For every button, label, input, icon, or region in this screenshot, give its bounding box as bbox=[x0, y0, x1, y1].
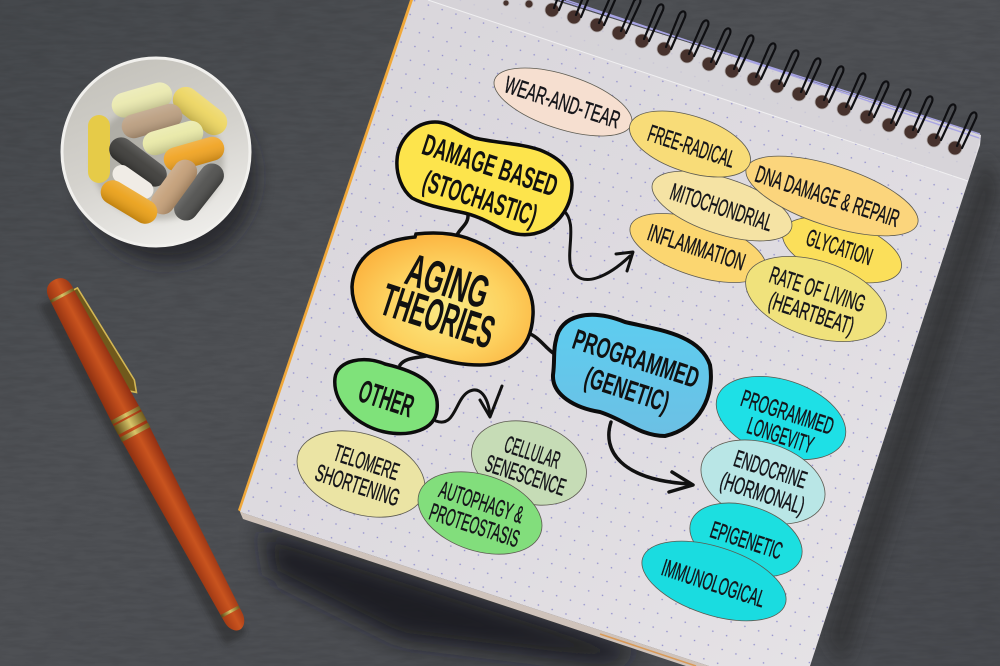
oval: immunological bbox=[632, 525, 796, 637]
oval: telomere shortening bbox=[286, 416, 436, 532]
capsules bbox=[88, 79, 232, 228]
oval: cellular senescence bbox=[461, 407, 597, 519]
oval: inflammation bbox=[622, 199, 774, 297]
node: programmed: PROGRAMMED bbox=[569, 324, 703, 395]
node: aging theories: THEORIES bbox=[375, 273, 501, 358]
orange bottom edge bbox=[600, 634, 696, 666]
oval: cellular senescence: CELLULAR bbox=[501, 431, 564, 475]
oval: glycation bbox=[774, 204, 910, 296]
bowl bbox=[62, 58, 250, 246]
notebook page bbox=[240, 0, 981, 666]
notebook bbox=[238, 0, 981, 666]
mind map bbox=[286, 54, 927, 637]
lavender page lines bbox=[560, 0, 980, 138]
pen body bbox=[40, 272, 254, 637]
oval: wear-and-tear bbox=[486, 54, 640, 150]
bowl shadow bbox=[80, 88, 256, 264]
oval: epigenetic bbox=[680, 490, 812, 590]
oval: autophagy and proteostasis: AUTOPHAGY & bbox=[436, 477, 527, 529]
oval: programmed longevity: PROGRAMMED bbox=[737, 385, 837, 441]
pen top band bbox=[50, 288, 74, 303]
connector lines bbox=[400, 214, 563, 365]
oval: wear-and-tear: WEAR-AND-TEAR bbox=[501, 71, 624, 134]
node: damage based: DAMAGE BASED bbox=[418, 129, 562, 203]
fountain pen bbox=[40, 269, 261, 640]
oval: programmed longevity: LONGEVITY bbox=[744, 413, 817, 459]
dot grid bbox=[240, 0, 981, 666]
oval: inflammation: INFLAMMATION bbox=[644, 219, 749, 276]
oval: endocrine hormonal bbox=[690, 425, 836, 539]
oval: mitochondrial: MITOCHONDRIAL bbox=[667, 179, 776, 237]
bowl of capsules bbox=[62, 58, 256, 264]
page stack edge bbox=[240, 512, 709, 666]
oval: free-radical bbox=[621, 98, 759, 190]
node: programmed bbox=[553, 315, 711, 436]
oval: endocrine hormonal: (HORMONAL) bbox=[717, 468, 808, 520]
oval: programmed longevity bbox=[706, 361, 856, 475]
oval: mitochondrial bbox=[644, 157, 800, 255]
oval: autophagy and proteostasis bbox=[407, 457, 553, 569]
oval: rate of living: RATE OF LIVING bbox=[766, 262, 869, 318]
oval: glycation: GLYCATION bbox=[803, 225, 876, 271]
pen clip bbox=[73, 285, 140, 396]
spiral binding bbox=[503, 0, 976, 155]
oval: dna damage and repair bbox=[737, 140, 927, 252]
oval: autophagy and proteostasis: PROTEOSTASIS bbox=[426, 499, 523, 553]
arrow: programmed to genetic theories bbox=[609, 422, 693, 492]
top perforated strip bbox=[428, 0, 981, 181]
node: programmed: (GENETIC) bbox=[580, 362, 673, 419]
node: damage based: (STOCHASTIC) bbox=[419, 165, 541, 233]
pen center band bbox=[111, 406, 150, 442]
oval: rate of living: (HEARTBEAT) bbox=[765, 287, 857, 340]
oval: immunological: IMMUNOLOGICAL bbox=[658, 554, 768, 613]
node: damage based bbox=[397, 122, 572, 235]
node: aging theories: AGING bbox=[400, 243, 496, 318]
oval: cellular senescence: SENESCENCE bbox=[482, 450, 569, 502]
arrow: damage based to stochastic theories bbox=[563, 210, 633, 280]
node: other: OTHER bbox=[354, 373, 419, 424]
node: other bbox=[335, 360, 437, 434]
node: aging theories bbox=[352, 233, 533, 365]
oval: endocrine hormonal: ENDOCRINE bbox=[730, 445, 810, 494]
pen shadow bbox=[50, 300, 236, 640]
oval: epigenetic: EPIGENETIC bbox=[707, 517, 786, 565]
pen end band bbox=[221, 606, 240, 618]
oval: free-radical: FREE-RADICAL bbox=[644, 120, 738, 174]
notebook shadows bbox=[262, 150, 1000, 666]
oval: rate of living bbox=[735, 240, 897, 358]
oval: telomere shortening: TELOMERE bbox=[330, 440, 402, 486]
capsule shadows bbox=[92, 104, 224, 220]
arrow: other to other theories bbox=[436, 386, 502, 422]
oval: telomere shortening: SHORTENING bbox=[312, 460, 403, 512]
orange page edge bbox=[238, 0, 414, 513]
